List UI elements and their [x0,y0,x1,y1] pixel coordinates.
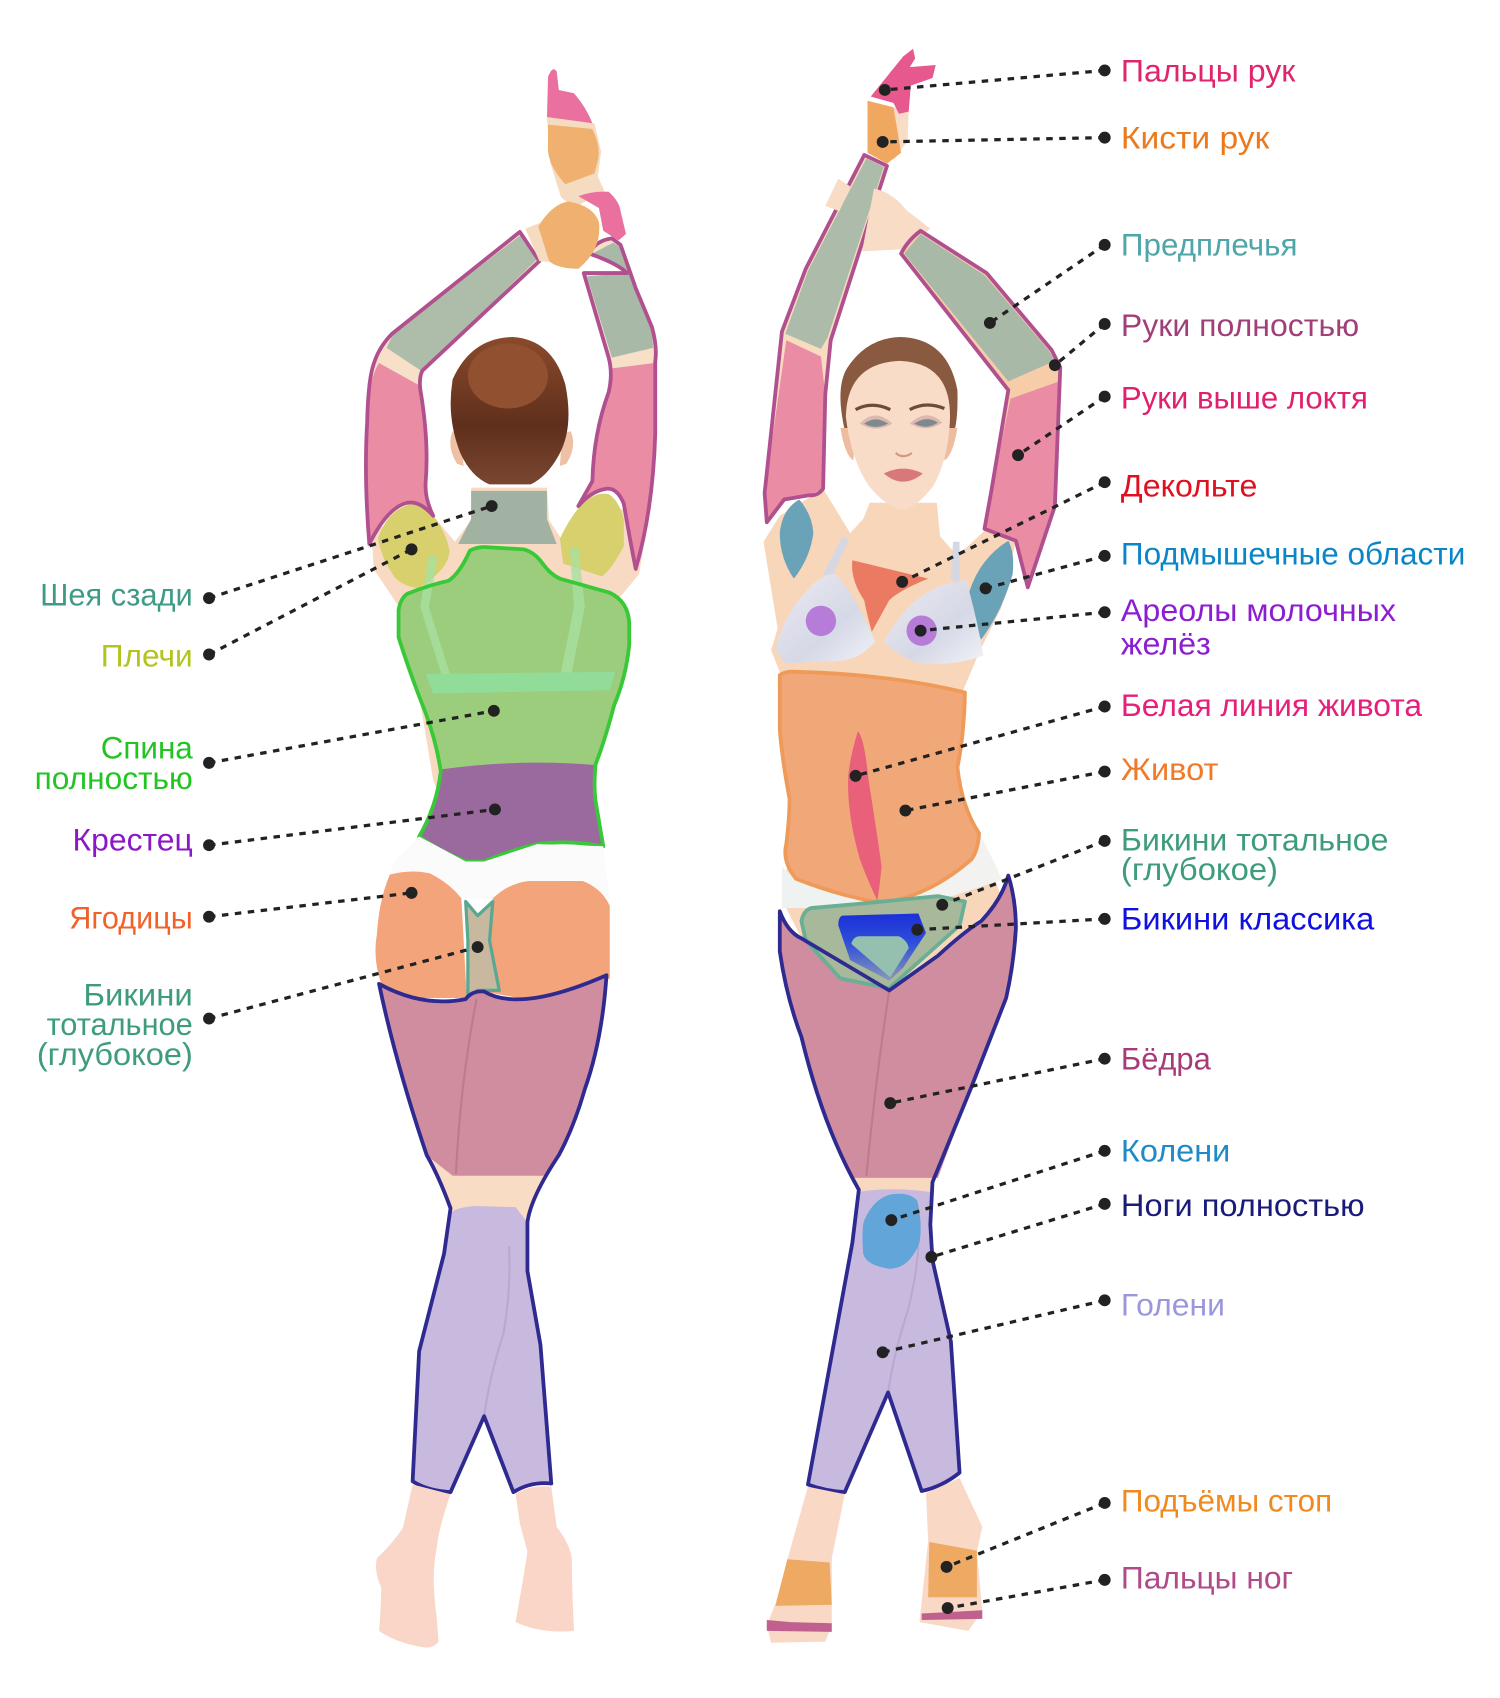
buttock right [484,881,610,1003]
hand front: skin [894,107,909,160]
callout: Ноги полностью [925,1188,1365,1263]
front left instep [775,1559,832,1606]
callout: Спина полностью [35,705,500,796]
left forearm front [785,158,884,349]
buttock left [375,871,467,998]
bra straps [420,547,585,683]
front left foot [767,1487,845,1643]
callout: Ягодицы [69,887,418,936]
callout: Руки выше локтя: Руки выше локтя [1121,381,1368,416]
hand front: palm [868,101,901,164]
back left foot [376,1485,451,1648]
callout: Руки полностью: Руки полностью [1121,308,1359,343]
front calf line [888,1246,918,1392]
right arm skin [901,231,1060,587]
shoulder right [560,494,624,576]
front legs outline [780,876,1016,1492]
right arm outline [578,238,656,569]
callout: Ягодицы: Ягодицы [69,901,193,936]
back head [450,337,573,484]
callout: Бикини классика [911,902,1375,937]
upper hand: wrist skin [547,117,604,208]
callout: Бикини тотальное (глубокое): тотальное [47,1007,193,1042]
hand front: fingers [871,49,936,114]
callout: Бёдра [884,1042,1211,1109]
front right foot [919,1478,982,1631]
lumbar purple zone [419,763,603,861]
callout: Белая линия живота: Белая линия живота [1121,688,1423,723]
callout: Пальцы ног: Пальцы ног [1121,1561,1293,1596]
callouts: right column [850,53,1465,1614]
front right instep [928,1542,977,1597]
front head [840,337,958,509]
callout: Декольте: Декольте [1121,468,1257,503]
callout: Плечи [101,543,418,673]
decollete [852,560,928,632]
upper hand: palm [548,125,599,184]
panties [390,837,610,899]
back bikini zone [466,902,499,998]
callout: Подъёмы стоп [941,1484,1332,1573]
callout: Кисти рук [877,120,1270,155]
underwear right part [899,834,1002,902]
callout: Крестец: Крестец [73,823,193,858]
front thighs [780,876,1016,1178]
right arm outline front [901,231,1060,587]
ears [840,428,957,461]
right forearm [587,243,653,358]
figure: front view [764,49,1060,1643]
callout: Подмышечные области: Подмышечные области [1121,537,1465,572]
figure: back view [366,69,656,1648]
eye shadow [860,415,942,429]
axilla right [969,541,1013,639]
callout: Декольте [896,468,1257,588]
callouts: left column [35,500,501,1072]
axilla left [780,500,813,579]
ears [450,431,573,466]
bikini inner [851,936,909,977]
callout: Ареолы молочных желёз: Ареолы молочных [1121,593,1396,628]
thigh gap line [456,999,477,1174]
left arm skin [765,155,887,522]
callout: Крестец [73,803,501,858]
callout: Бикини тотальное (глубокое) [37,941,484,1072]
callout: Бикини тотальное (глубокое): Бикини [83,978,193,1013]
knee zone [862,1194,921,1269]
shoulder left [378,504,449,588]
callout: Подъёмы стоп: Подъёмы стоп [1121,1484,1332,1519]
right arm: skin base [578,238,656,569]
brows [856,405,944,410]
face [846,361,950,509]
left upper arm front [765,340,825,522]
callout: Бикини тотальное (глубокое): (глубокое) [1121,852,1278,887]
bikini total zone [801,896,965,988]
calf gap line [484,1246,510,1416]
nose [896,453,912,456]
callout: Ареолы молочных желёз: желёз [1121,626,1211,661]
hair [840,337,958,439]
back calves [413,1206,551,1492]
upper hand: fingers [547,69,592,124]
front thigh line [866,990,889,1176]
areola right [906,615,937,646]
bra left cup [775,574,875,663]
callout: Ноги полностью: Ноги полностью [1121,1188,1365,1223]
callout: Спина полностью: Спина [101,731,193,766]
right forearm front [904,234,1055,381]
callout: Кисти рук: Кисти рук [1121,120,1270,155]
front right toes [922,1610,982,1620]
underwear left part [782,867,875,908]
right upper arm front [984,381,1059,587]
eyes [864,419,938,427]
left forearm [387,234,536,372]
callout: Предплечья [984,228,1297,329]
callout: Пальцы ног [942,1561,1293,1614]
callout: Шея сзади: Шея сзади [40,578,193,613]
callout: Живот [899,752,1218,816]
callout: Колени: Колени [1121,1134,1230,1169]
callout: Плечи: Плечи [101,638,193,673]
back legs: skin [379,975,606,1492]
callout: Бёдра: Бёдра [1121,1042,1211,1077]
lips [884,469,923,482]
back green zone [399,547,629,861]
callout: Шея сзади [40,500,498,613]
left arm outline front [765,155,887,522]
front left toes [767,1620,832,1632]
callout: Бикини тотальное (глубокое): (глубокое) [37,1037,193,1072]
callout: Бикини классика: Бикини классика [1121,902,1375,937]
lower hand: fingers [578,192,626,241]
bra band [426,672,615,694]
left arm outline [366,232,539,544]
callout: Белая линия живота [850,688,1423,782]
callout: Пальцы рук: Пальцы рук [1121,53,1296,88]
right upper arm [578,363,655,569]
callout: Спина полностью: полностью [35,761,193,796]
bra straps front [823,536,960,583]
back skin silhouette [371,488,650,834]
back outline [399,547,629,861]
callout: Предплечья: Предплечья [1121,228,1297,263]
neck area [458,491,557,544]
back thighs [379,975,606,1176]
left arm: skin base [366,232,539,544]
hair bun [468,344,548,409]
bikini classic zone [838,913,926,981]
back right foot [516,1486,574,1632]
hair [451,337,568,484]
left upper arm [366,363,433,544]
front skin silhouette [764,489,1016,990]
callout: Руки полностью [1049,308,1359,371]
forearm behind head [825,179,930,251]
callout: Голени: Голени [1121,1287,1225,1322]
bra right cup [884,580,983,664]
callout: Пальцы рук [879,53,1296,96]
front calves [808,1189,960,1492]
callout: Подмышечные области [980,537,1465,594]
back legs outline [379,975,606,1492]
callout: Руки выше локтя [1012,381,1368,461]
callout: Живот: Живот [1121,752,1218,787]
lower hand: wrist [525,222,555,262]
front legs: skin [780,876,1016,1492]
callout: Бикини тотальное (глубокое): Бикини тотальное [1121,823,1388,858]
lower hand: palm [538,202,599,269]
abdomen zone [780,672,979,902]
callout: Голени [877,1287,1225,1358]
callout: Бикини тотальное (глубокое) [936,823,1388,911]
callout: Колени [885,1134,1230,1226]
callout: Ареолы молочных желёз [915,593,1396,661]
areola left [806,606,836,636]
linea alba [848,731,882,900]
